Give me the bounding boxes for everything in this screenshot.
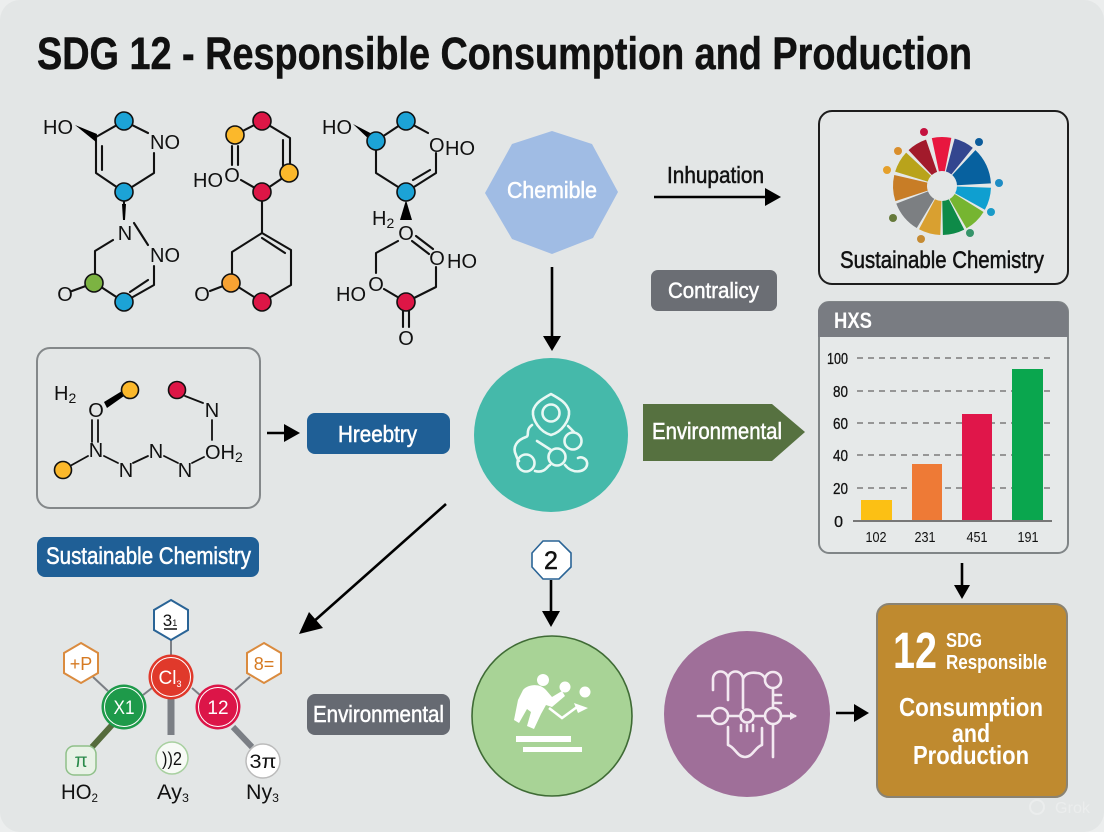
teal circle icon <box>474 358 628 512</box>
panel: bar chart HXS: 231 <box>914 529 936 546</box>
hexagon: top <box>154 600 188 640</box>
watermark: Grok <box>1055 800 1091 817</box>
panel: bar chart HXS <box>818 302 1068 553</box>
small node: Ny3: 3π <box>250 752 276 773</box>
panel: bar chart HXS: 80 <box>833 384 848 401</box>
molecule 3 <box>322 112 477 350</box>
molecule 3: H <box>372 208 386 230</box>
panel: molecule box: O <box>88 400 104 422</box>
panel: bar chart HXS: 40 <box>833 448 848 465</box>
molecule 1: O <box>57 284 73 306</box>
small node: Ny3: 3 <box>272 791 279 805</box>
panel: bar chart HXS: 451 <box>966 529 988 546</box>
node: 12: 12 <box>207 698 229 719</box>
octagon: Chemible: Chemible <box>507 177 597 203</box>
card: SDG 12: SDG <box>946 630 982 652</box>
arrow with label: Inhupation <box>654 162 781 206</box>
node: Cl: 3 <box>176 679 181 689</box>
panel: molecule box: N <box>149 441 163 463</box>
hexagon: right <box>247 643 281 683</box>
panel: Sustainable Chemistry wheel <box>819 111 1068 284</box>
network diagram <box>61 600 281 805</box>
arrow: badge to green circle <box>542 580 560 627</box>
molecule 3: O <box>368 274 384 296</box>
panel: molecule box: N <box>205 400 219 422</box>
label: Contralicy: Contralicy <box>668 278 759 303</box>
molecule 3: HO <box>447 251 477 273</box>
long diagonal arrow <box>299 504 446 634</box>
molecule 2: O <box>194 284 210 306</box>
node: X1: X1 <box>114 698 134 719</box>
small node: Ny3: Ny <box>246 781 272 804</box>
arrow: chart to SDG 12 card <box>954 563 970 599</box>
card: SDG 12: Consumption <box>899 692 1043 722</box>
molecule 1 <box>43 112 180 311</box>
octagon badge: 2: 2 <box>544 547 558 575</box>
node: Cl: Cl <box>159 668 176 689</box>
hexagon: left <box>64 643 98 683</box>
network connectors <box>92 639 252 747</box>
small node: Ay3 <box>156 742 189 805</box>
panel: bar chart HXS: 20 <box>833 481 848 498</box>
card: SDG 12: Responsible <box>946 652 1047 674</box>
panel: bar chart HXS: 60 <box>833 416 848 433</box>
molecule 3: O <box>398 223 414 245</box>
label: Hreebtry <box>307 413 450 454</box>
small node: HO2: HO <box>61 781 92 804</box>
label: Environmental gray <box>307 694 450 735</box>
panel: molecule box: N <box>89 440 103 462</box>
node: X1 <box>102 684 146 730</box>
hexagon: left: +P <box>70 654 92 674</box>
node: Cl <box>148 654 194 700</box>
molecule 2: O <box>224 165 240 187</box>
node: 12 <box>196 684 240 730</box>
arrow: purple circle to SDG 12 card <box>836 704 869 722</box>
molecule 3: HO <box>445 138 475 160</box>
watermark <box>1030 800 1091 817</box>
arrow with label: Inhupation: Inhupation <box>667 162 764 188</box>
label: Environmental gray: Environmental <box>313 701 444 727</box>
ribbon arrow: Environmental <box>643 404 805 461</box>
small node: Ay3: 3 <box>182 791 189 805</box>
panel: molecule box <box>37 348 260 508</box>
molecule 2 <box>193 112 298 311</box>
card: SDG 12 <box>877 604 1067 797</box>
molecule 3: O <box>429 248 445 270</box>
arrow: Chemible down to teal circle <box>543 267 561 351</box>
molecule 1: NO <box>150 245 180 267</box>
octagon badge: 2 <box>532 541 571 579</box>
label: Hreebtry: Hreebtry <box>338 421 417 447</box>
green circle icon <box>472 636 632 796</box>
panel: bar chart HXS: 0 <box>834 514 843 531</box>
panel: bar chart HXS: 100 <box>827 351 848 368</box>
card: SDG 12: and <box>952 718 990 748</box>
panel: bar chart HXS: 191 <box>1018 529 1038 546</box>
panel: bar chart HXS: HXS <box>834 308 872 333</box>
label: Contralicy <box>651 270 777 311</box>
card: SDG 12: 12 <box>893 622 937 679</box>
panel: molecule box: 2 <box>235 449 243 465</box>
panel: molecule box: H <box>54 383 68 405</box>
card: SDG 12: Production <box>913 740 1029 770</box>
molecule 3: HO <box>322 117 352 139</box>
wheel segments <box>897 141 987 231</box>
molecule 1: NO <box>150 132 180 154</box>
octagon: Chemible <box>485 131 618 254</box>
arrow: molecule box to Hreebtry <box>267 424 300 442</box>
small node: HO2 <box>61 746 98 805</box>
hexagon: top: 31 <box>163 611 177 630</box>
small node: Ay3: ))2 <box>162 749 182 769</box>
panel: molecule box: N <box>178 460 192 482</box>
molecule 3: HO <box>336 284 366 306</box>
panel: molecule box: OH <box>205 442 235 464</box>
purple circle icon <box>664 631 830 797</box>
small node: Ay3: Ay <box>157 781 181 804</box>
panel: bar chart HXS: 102 <box>866 529 886 546</box>
molecule 3: O <box>398 328 414 350</box>
molecule 1: HO <box>43 117 73 139</box>
molecule 2: HO <box>193 170 223 192</box>
small node: Ny3 <box>246 744 280 805</box>
molecule 3: 2 <box>386 215 394 231</box>
label: Sustainable Chemistry: Sustainable Chemistry <box>46 543 251 570</box>
panel: Sustainable Chemistry wheel: Sustainable Chemistry <box>840 247 1044 274</box>
molecule 1: N <box>118 223 132 245</box>
small node: HO2: π <box>74 751 88 772</box>
hexagon: right: 8= <box>254 654 274 674</box>
bars <box>861 369 1043 521</box>
ribbon arrow: Environmental: Environmental <box>652 418 782 444</box>
panel: molecule box: 2 <box>68 390 76 406</box>
label: Sustainable Chemistry <box>37 537 259 577</box>
small node: HO2: 2 <box>92 791 98 805</box>
panel: molecule box: N <box>119 460 133 482</box>
molecule 3: O <box>429 135 445 157</box>
